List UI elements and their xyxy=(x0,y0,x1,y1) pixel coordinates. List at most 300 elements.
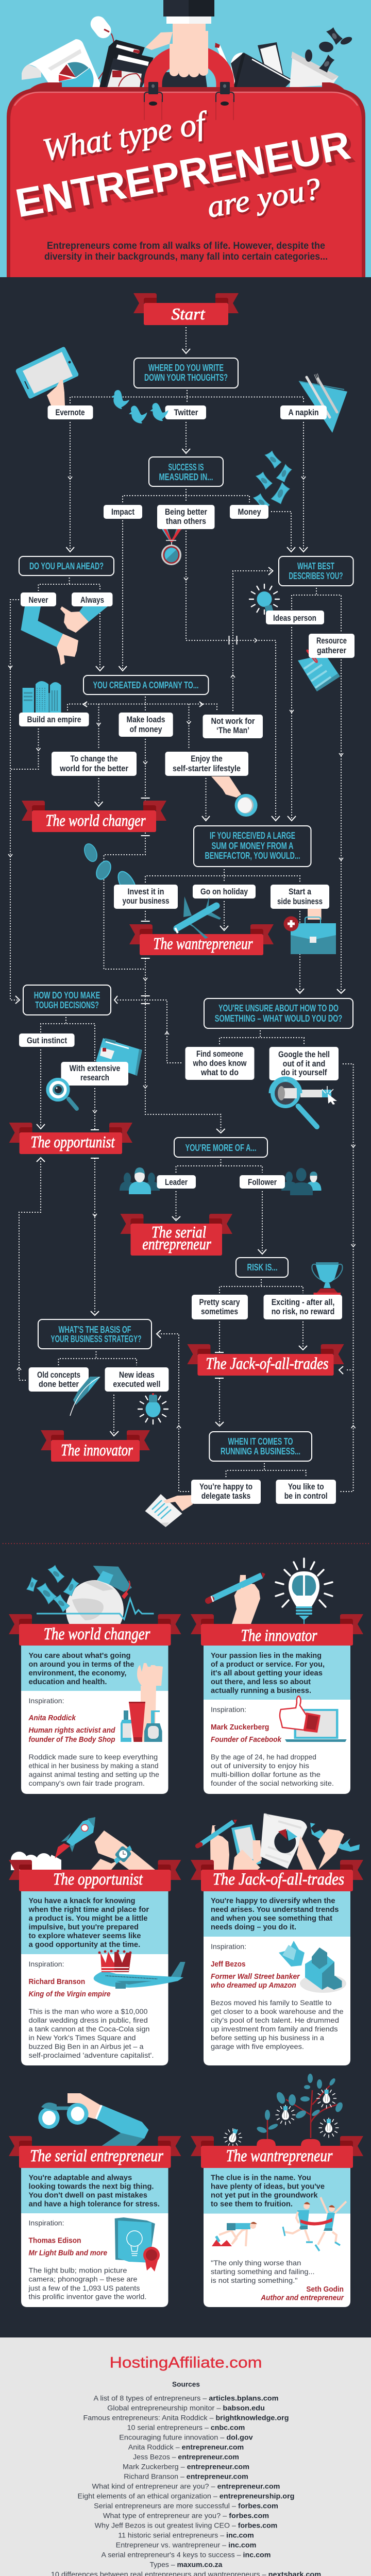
summary text: of a product or service. For you, xyxy=(211,1660,325,1669)
question box: large sum of money xyxy=(194,826,311,867)
person role: Human rights activist and xyxy=(29,1726,116,1735)
sources list: Richard Branson – entrepreneur.com xyxy=(124,2472,248,2480)
person role: Mr Light Bulb and more xyxy=(29,2249,107,2258)
icon: folder xyxy=(96,1038,142,1076)
summary text: a good opportunity at the time. xyxy=(29,1941,140,1949)
arrow: happy to delegate to strategy xyxy=(157,1330,189,1492)
icon: flying banknotes xyxy=(254,451,295,511)
ribbon heading xyxy=(9,2136,181,2168)
question box: do you plan ahead: DO YOU PLAN AHEAD? xyxy=(29,561,104,571)
icon: trophy xyxy=(312,1262,343,1295)
icon: smartphone xyxy=(258,42,284,77)
question box: tough decisions xyxy=(23,985,111,1015)
description xyxy=(211,1753,334,1787)
inspiration label: Inspiration: xyxy=(211,1705,246,1714)
icon: hand with pencil and brain bulb xyxy=(208,1558,332,1624)
arrow: company splitter xyxy=(68,697,217,750)
icon: magnifier with eye xyxy=(46,1078,77,1109)
card summary band xyxy=(21,1646,168,1691)
arrow: strategy splitter xyxy=(59,1351,137,1365)
brand name: HostingAffiliate.com xyxy=(110,2354,262,2371)
ribbon heading xyxy=(191,2136,363,2168)
summary text xyxy=(211,1897,339,1931)
ribbon: the jack-of-all-trades xyxy=(187,1344,344,1376)
icon: falling coins xyxy=(82,842,140,899)
icon: notes with paperclip xyxy=(298,650,340,691)
summary text: Your passion lies in the making xyxy=(211,1652,322,1660)
summary text: You're happy to diversify when the xyxy=(211,1897,335,1905)
option: exciting: Exciting - after all, xyxy=(272,1297,334,1307)
icon: hand carrying briefcase xyxy=(283,909,336,954)
ribbon: the jack-of-all-trades: The Jack-of-all-trades xyxy=(206,1354,328,1372)
person name: Mark Zuckerberg xyxy=(211,1723,269,1732)
icon: hands with pencil, phone, report, wrench xyxy=(197,1814,360,1870)
ribbon heading: The opportunist xyxy=(53,1870,143,1889)
ribbon: start: Start xyxy=(171,304,206,323)
inspiration label: Inspiration: xyxy=(29,1960,64,1968)
description xyxy=(28,2266,146,2300)
option: find someone: who does know xyxy=(193,1058,247,1068)
arrow: twitter to success xyxy=(182,422,190,453)
question box: where do you write: WHERE DO YOU WRITE xyxy=(148,363,224,373)
summary text: to explore whatever seems like xyxy=(29,1932,141,1940)
title xyxy=(12,105,354,226)
question box: large sum of money: BENEFACTOR, YOU WOULD... xyxy=(205,851,300,861)
icon: hand with mirror xyxy=(211,776,258,817)
question box: business strategy xyxy=(38,1319,151,1349)
option: always: Always xyxy=(80,595,104,605)
icon: light bulb lower xyxy=(138,1393,168,1424)
option: google: do it yourself xyxy=(281,1067,327,1077)
option: to change the world: world for the better xyxy=(59,764,128,773)
person role xyxy=(29,1726,116,1744)
arrow: money to describes you xyxy=(271,512,295,552)
inspiration label: Inspiration: xyxy=(29,1697,64,1705)
arrow: describes you splitter xyxy=(292,588,341,632)
sources list: 10 serial entrepreneurs – cnbc.com xyxy=(127,2423,245,2431)
option: new ideas xyxy=(105,1367,168,1392)
icon: computer mouse with cable xyxy=(88,13,114,88)
arrow: question 1 splitter xyxy=(70,390,303,403)
description: against animal testing and setting up the xyxy=(29,1770,159,1778)
arrow: running business splitter xyxy=(226,1463,306,1477)
option: a napkin: A napkin xyxy=(289,408,318,417)
sources list: Serial entrepreneurs are more successful – forbes.com xyxy=(94,2501,278,2510)
card summary band xyxy=(204,1891,350,1937)
ribbon: the innovator: The innovator xyxy=(61,1440,133,1459)
option: pretty scary: sometimes xyxy=(201,1307,238,1316)
option: leader: Leader xyxy=(165,1177,188,1187)
ribbon: the serial entrepreneur xyxy=(121,1214,232,1256)
sources list: What type of entrepreneur are you? – forbes.com xyxy=(103,2511,269,2519)
icon: stacked boxes xyxy=(279,1941,346,1993)
summary text: actually running a business. xyxy=(211,1687,311,1695)
description: garage with five employees. xyxy=(211,2042,304,2050)
hand gripping the handle xyxy=(145,24,208,77)
left clasp xyxy=(144,82,162,120)
icon: dark folder with documents xyxy=(99,40,154,88)
question box: running a business: WHEN IT COMES TO xyxy=(228,1436,293,1447)
ribbon heading xyxy=(191,1860,363,1891)
card summary band xyxy=(21,2168,168,2213)
arrow: napkin to describes you xyxy=(299,422,308,552)
summary text: needs doing – you do it. xyxy=(211,1923,296,1931)
footer background xyxy=(0,2337,371,2576)
description: ethical in her business by making a stand xyxy=(29,1761,159,1770)
arrow: being better to self bridge xyxy=(184,531,280,821)
option: old concepts: Old concepts xyxy=(37,1370,80,1380)
card summary band xyxy=(21,1891,168,1954)
arrow: evernote to plan ahead xyxy=(66,422,74,552)
summary text: You have a knack for knowing xyxy=(29,1897,135,1905)
option: extensive research: With extensive xyxy=(70,1063,120,1073)
arrow: research through opportunist to strategy xyxy=(91,1088,99,1315)
question box: success is measured: MEASURED IN... xyxy=(159,472,213,482)
sources list: A list of 8 types of entrepreneurs – articles.bplans.com xyxy=(94,2394,278,2402)
summary text: have plenty of ideas, but you've xyxy=(211,2183,325,2191)
summary text xyxy=(29,1652,134,1686)
option: gut instinct xyxy=(19,1033,75,1047)
ribbon: the wantrepreneur: The wantrepreneur xyxy=(154,934,253,953)
summary text: education and health. xyxy=(29,1678,107,1686)
option: old concepts: done better xyxy=(39,1379,79,1389)
option: money: Money xyxy=(238,507,261,517)
option: being better than others xyxy=(157,505,214,529)
arrow: google to right-side line xyxy=(339,1064,356,1492)
description: this prolific inventor gave the world. xyxy=(29,2292,146,2300)
title line: entrepreneur: ENTREPRENEUR xyxy=(12,122,354,226)
person role: founder of The Body Shop xyxy=(29,1736,115,1744)
icon: napkin with knife and fork xyxy=(299,374,347,433)
person name: Richard Branson xyxy=(29,1978,85,1986)
redraw: magnifier rim over google box xyxy=(271,1078,300,1093)
ribbon heading: The wantrepreneur xyxy=(226,2147,332,2165)
shirt cuff xyxy=(166,16,211,24)
option: make loads of money xyxy=(119,713,173,737)
option: enjoy the self-starter lifestyle: Enjoy the xyxy=(191,754,223,764)
suitcase outer edge xyxy=(7,87,365,277)
option: go on holiday: Go on holiday xyxy=(200,887,248,896)
inspiration label: Inspiration: xyxy=(29,2219,64,2227)
description: out of university to enjoy his xyxy=(211,1761,309,1770)
arrow: never to tough decisions xyxy=(8,600,20,1004)
description: before setting up his business in a xyxy=(211,2033,324,2042)
ribbon: the world changer xyxy=(22,801,166,832)
summary text: a product is. You might be a little xyxy=(29,1914,147,1923)
option: resource gatherer: Resource xyxy=(316,636,347,646)
option: impact xyxy=(104,505,142,519)
option: ideas person xyxy=(266,611,324,624)
sources list: What kind of entrepreneur are you? – entrepreneur.com xyxy=(92,2482,280,2490)
title line: are you: are you? xyxy=(205,171,323,224)
icon: airplane xyxy=(175,896,221,939)
option: not work for the man xyxy=(203,715,263,738)
person name: Thomas Edison xyxy=(29,2237,81,2245)
description: Bezos moved his family to Seattle to xyxy=(211,1998,332,2007)
sources list: Entrepreneur vs. wantrepreneur – inc.com xyxy=(116,2540,256,2549)
description: camera; phonograph – these are xyxy=(29,2275,138,2283)
icon: hand holding paper xyxy=(145,1494,193,1527)
option: not work for the man: Not work for xyxy=(211,716,255,726)
question box: where do you write xyxy=(134,358,238,388)
option: impact: Impact xyxy=(111,507,134,517)
summary text: environment, the economy, xyxy=(29,1669,127,1677)
option: evernote xyxy=(47,405,93,419)
description: get closer to a book warehouse and the xyxy=(211,2007,344,2015)
summary text: when the right time and place for xyxy=(28,1906,149,1914)
header background xyxy=(0,0,371,277)
panel: the jack-of-all-trades xyxy=(191,1814,363,2065)
question box: where do you write: DOWN YOUR THOUGHTS? xyxy=(144,372,228,383)
option: resource gatherer: gatherer xyxy=(317,646,346,655)
suit sleeve xyxy=(163,0,214,16)
summary text: You're adaptable and always xyxy=(29,2174,132,2182)
option: pretty scary: Pretty scary xyxy=(199,1297,240,1307)
person name: Jeff Bezos xyxy=(211,1960,245,1969)
ribbon heading: The world changer xyxy=(44,1625,150,1643)
arrow: leader to serial xyxy=(172,1191,180,1221)
icon: laptop with thumbs up xyxy=(280,1696,347,1742)
option: never: Never xyxy=(29,595,48,605)
arrow: follower to risk xyxy=(258,1191,266,1254)
icon: feather xyxy=(70,1377,100,1416)
panel: the wantrepreneur xyxy=(191,2074,363,2307)
option: make loads of money: of money xyxy=(130,724,162,734)
option: evernote: Evernote xyxy=(56,408,85,417)
right clasp xyxy=(216,82,234,120)
inspiration label: Inspiration: xyxy=(211,1942,246,1951)
panel: the opportunist xyxy=(9,1817,185,2065)
sources list: A serial entrepreneur's 4 keys to success – inc.com xyxy=(101,2550,271,2558)
icon: magnifier over search bar xyxy=(271,1078,337,1127)
question box: risk is: RISK IS... xyxy=(247,1262,277,1273)
card body xyxy=(204,2168,350,2307)
arrow: unsure splitter xyxy=(220,1030,304,1044)
sources list: Mark Zuckerberg – entrepreneur.com xyxy=(123,2462,249,2470)
summary text: on around you in terms of the xyxy=(29,1660,134,1669)
option: find someone: what to do xyxy=(200,1067,239,1077)
title line: what type of: What type of xyxy=(40,105,212,168)
icon: arm with binoculars xyxy=(38,2093,148,2146)
description: By the age of 24, he had dropped xyxy=(211,1753,316,1761)
description: This is the man who wore a $10,000 xyxy=(29,2007,148,2015)
card summary band xyxy=(204,1646,350,1700)
option: new ideas: executed well xyxy=(113,1379,160,1389)
option: find someone xyxy=(185,1047,255,1080)
option: exciting: no risk, no reward xyxy=(272,1307,334,1316)
option: google: Google the hell xyxy=(278,1049,330,1059)
option: delegate tasks: You’re happy to xyxy=(199,1482,252,1492)
card body xyxy=(21,2168,168,2307)
arrow: risk splitter xyxy=(220,1279,303,1293)
summary text: not yet put in the groundwork xyxy=(211,2192,318,2200)
question box: more of a xyxy=(174,1138,267,1157)
option: go on holiday xyxy=(193,885,256,899)
summary text: looking towards the next big thing. xyxy=(29,2183,154,2191)
card body xyxy=(204,1891,350,2065)
ribbon: the opportunist: The opportunist xyxy=(31,1132,115,1151)
arrow: always to company xyxy=(96,613,104,671)
question box: tough decisions: TOUGH DECISIONS? xyxy=(35,1000,99,1010)
summary text: need arises. You understand trends xyxy=(211,1906,339,1914)
option: pretty scary xyxy=(192,1295,248,1319)
intro text xyxy=(44,241,328,262)
intro text: Entrepreneurs come from all walks of life. However, despite the xyxy=(47,241,325,251)
icon: falling coins and banknotes xyxy=(305,27,353,75)
option: never xyxy=(21,592,56,606)
option: build an empire xyxy=(19,713,89,726)
description: dollar wedding dress in public, fired xyxy=(29,2016,148,2024)
summary text: and when you see something that xyxy=(211,1914,332,1923)
card summary band xyxy=(204,2168,350,2214)
ribbon: the innovator xyxy=(41,1430,150,1462)
option: start a side business: side business xyxy=(277,896,323,906)
question box: running a business: RUNNING A BUSINESS... xyxy=(221,1446,300,1456)
icon: idea tree with bulbs xyxy=(224,2074,344,2146)
icon: light bulb xyxy=(249,584,279,614)
description: Roddick made sure to keep everything xyxy=(29,1753,158,1761)
arrow: tough decisions splitter xyxy=(41,1017,95,1062)
option: extensive research: research xyxy=(80,1073,109,1082)
description: up investment from family and friends xyxy=(211,2025,338,2033)
ribbon heading: The Jack-of-all-trades xyxy=(213,1870,344,1889)
option: extensive research xyxy=(61,1062,128,1086)
ribbon heading: The serial entrepreneur xyxy=(30,2147,163,2165)
option: to change the world xyxy=(52,752,137,776)
flowchart background xyxy=(0,277,371,2338)
icon: medal xyxy=(161,529,182,565)
option: be in control: be in control xyxy=(284,1491,328,1501)
sources list: Anita Roddick – entrepreneur.com xyxy=(128,2443,244,2451)
icon: tablet in hand xyxy=(16,347,78,405)
summary text xyxy=(28,1897,149,1949)
suitcase body xyxy=(10,92,362,277)
option: a napkin xyxy=(280,405,327,419)
option: delegate tasks xyxy=(191,1480,261,1504)
sources list: Encouraging future innovation – dol.gov xyxy=(119,2433,253,2441)
arrow: side business to unsure xyxy=(296,911,304,993)
question box: what best describes you: WHAT BEST xyxy=(297,561,334,571)
option: twitter: Twitter xyxy=(174,408,198,417)
summary text: and have a high tolerance for stress. xyxy=(29,2200,160,2208)
person role: King of the Virgin empire xyxy=(29,1990,110,1998)
summary text: out there, and less so about xyxy=(211,1678,311,1686)
hump behind bag right xyxy=(322,82,346,92)
description xyxy=(29,2007,154,2059)
panel: the innovator xyxy=(191,1558,363,1794)
icon: thumbs up and down arms xyxy=(21,606,108,665)
option: old concepts xyxy=(29,1367,89,1392)
quote: is not starting something." xyxy=(211,2276,298,2284)
option: google xyxy=(269,1047,339,1080)
question box: unsure xyxy=(204,998,353,1028)
summary text: to see them to fruition. xyxy=(211,2200,293,2208)
summary text: impulsive, but you're prepared xyxy=(29,1923,139,1931)
question box: large sum of money: IF YOU RECEIVED A LARGE xyxy=(210,831,295,841)
option: build an empire: Build an empire xyxy=(27,715,81,724)
question box: risk is xyxy=(236,1258,288,1277)
icon: pen tip xyxy=(215,43,220,48)
question box: business strategy: WHAT'S THE BASIS OF xyxy=(59,1325,131,1335)
arrow: impact to company xyxy=(119,520,127,671)
arrow: to change the world to world changer xyxy=(95,778,103,806)
ribbon heading xyxy=(9,1614,181,1646)
arrow: gut instinct to opportunist xyxy=(37,1049,45,1129)
description xyxy=(211,1998,344,2050)
option: find someone: Find someone xyxy=(196,1049,243,1059)
arrow: resource gatherer to unsure xyxy=(337,659,345,993)
person role: Former Wall Street banker xyxy=(211,1973,300,1981)
sources list: Jess Bezos – entrepreneur.com xyxy=(133,2452,239,2461)
arrow: benefactor splitter xyxy=(145,869,300,883)
option: follower xyxy=(240,1175,285,1189)
arrow: holiday to wantrepreneur xyxy=(220,901,228,930)
briefcase handle xyxy=(153,54,225,89)
question box: tough decisions: HOW DO YOU MAKE xyxy=(34,990,100,1001)
person role: Founder of Facebook xyxy=(211,1736,282,1744)
ribbon: the opportunist xyxy=(9,1123,132,1154)
question box: you created a company xyxy=(83,675,208,694)
summary text: You care about what's going xyxy=(29,1652,131,1660)
arrow: self-starter to benefactor xyxy=(202,778,210,821)
summary text xyxy=(211,2174,325,2208)
question box: success is measured xyxy=(149,457,223,486)
description: multi-billion dollar fortune as the xyxy=(211,1770,321,1778)
sources list: Famous entrepreneurs: Anita Roddick – brightknowledge.org xyxy=(83,2413,289,2421)
question box: do you plan ahead xyxy=(19,556,114,575)
option: start a side business xyxy=(271,885,329,909)
summary text xyxy=(29,2174,160,2208)
option: be in control xyxy=(276,1480,336,1504)
option: be in control: You like to xyxy=(288,1482,324,1492)
icon: city buildings xyxy=(23,681,61,713)
option: exciting xyxy=(264,1295,342,1319)
icon: globe, graduation cap, money, heartbeat xyxy=(23,1565,154,1640)
sources list: Eight elements of an ethical organization – entrepreneurship.org xyxy=(77,2492,295,2500)
option: new ideas: New ideas xyxy=(119,1370,155,1380)
option: ideas person: Ideas person xyxy=(273,613,316,623)
arrow: start to first question xyxy=(182,327,190,353)
card body xyxy=(204,1646,350,1794)
sources list: Why Jeff Bezos is out greatest living CEO – forbes.com xyxy=(95,2521,277,2529)
option: start a side business: Start a xyxy=(289,887,311,896)
description: in New York's Times Square and xyxy=(29,2033,136,2042)
option: enjoy the self-starter lifestyle: self-starter lifestyle xyxy=(173,764,241,773)
arrow: not work for the man to describes you xyxy=(231,567,273,711)
summary text xyxy=(211,1652,325,1695)
arrow: find someone to tough decisions xyxy=(114,996,181,1063)
question box: what best describes you: DESCRIBES YOU? xyxy=(289,571,343,581)
icon: report paper with pie chart xyxy=(22,39,102,88)
author role: Author and entrepreneur xyxy=(260,2294,344,2302)
footer xyxy=(51,2354,321,2576)
question box: what best describes you xyxy=(279,556,353,586)
ribbon: the world changer: The world changer xyxy=(45,811,146,829)
description: The light bulb; motion picture xyxy=(29,2266,127,2274)
option: being better than others: than others xyxy=(166,516,206,526)
card body xyxy=(21,1891,168,2065)
option: invest in business: your business xyxy=(123,896,169,906)
option: leader xyxy=(157,1175,196,1189)
red dotted divider xyxy=(3,1543,369,1544)
ribbon: the wantrepreneur xyxy=(129,924,274,955)
ribbon: the serial entrepreneur: The serial xyxy=(151,1223,206,1241)
arrow: exciting to jack xyxy=(299,1321,307,1350)
summary text: The clue is in the name. You xyxy=(211,2174,311,2182)
quote: "The only thing worse than xyxy=(211,2259,301,2267)
icon: pen xyxy=(215,43,227,63)
icon: blank paper sheet xyxy=(290,52,339,88)
